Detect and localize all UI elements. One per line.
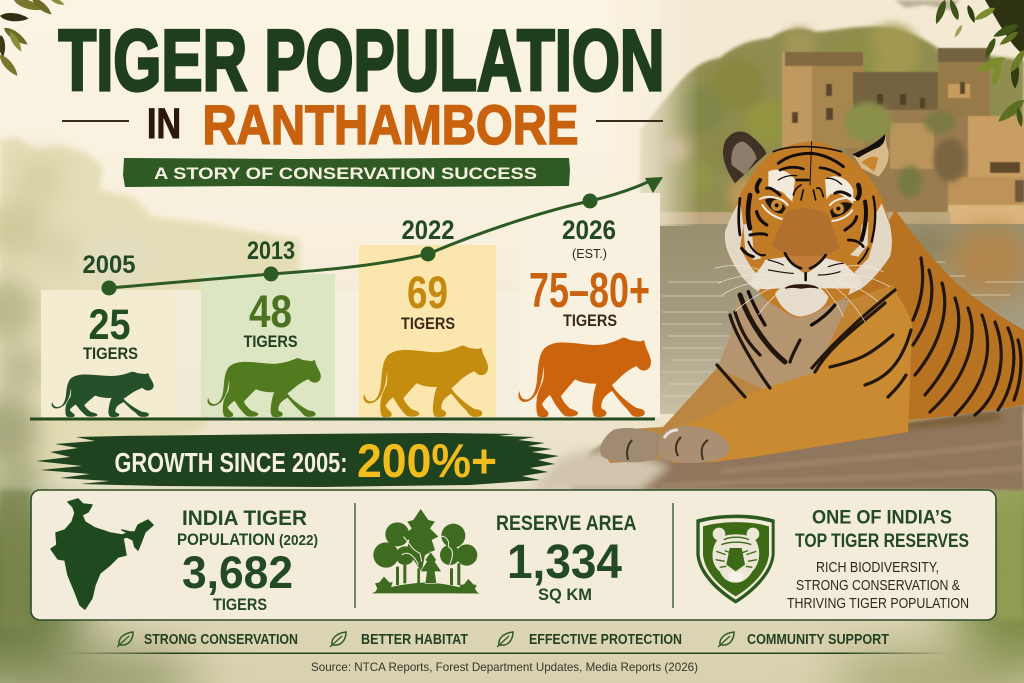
- chin: [775, 282, 828, 317]
- fort: [782, 48, 1024, 227]
- icon: tiger shield: [696, 515, 775, 604]
- top reserves text: THRIVING TIGER POPULATION: [787, 596, 969, 612]
- ground line: [30, 418, 655, 420]
- left ear: [723, 132, 767, 183]
- India population text: 3,682: [182, 547, 293, 598]
- India population text: INDIA TIGER: [182, 507, 307, 530]
- source note: Source: NTCA Reports, Forest Department Updates, Media Reports (2026): [311, 660, 698, 674]
- rock ledge: [530, 404, 1024, 492]
- factor: community support: COMMUNITY SUPPORT: [747, 632, 889, 648]
- icon: forest: [372, 509, 480, 593]
- column: 2022: 2022: [402, 215, 454, 245]
- factor: better habitat: [330, 632, 468, 648]
- cheek ruffs: [725, 200, 892, 295]
- factor: effective protection: EFFECTIVE PROTECTION: [529, 632, 682, 648]
- column: 2005: [41, 251, 176, 417]
- column: 2013: [201, 237, 335, 417]
- reserve area text: 1,334: [507, 536, 622, 589]
- title: TIGER POPULATION: [58, 13, 664, 109]
- column: 2013: 2013: [247, 237, 295, 265]
- nose: [785, 253, 826, 280]
- head base: [725, 142, 892, 318]
- column: 2026 estimate: TIGERS: [563, 312, 617, 330]
- India population text: TIGERS: [213, 596, 267, 614]
- tagline banner: A STORY OF CONSERVATION SUCCESS: [154, 164, 537, 183]
- India population text: (2022): [279, 533, 318, 549]
- tiger body: [800, 210, 1024, 420]
- tiger chest: [717, 285, 912, 392]
- nose bridge: [772, 208, 840, 257]
- forehead patches: [768, 170, 853, 203]
- factor: strong conservation: STRONG CONSERVATION: [144, 632, 298, 648]
- top reserves text: TOP TIGER RESERVES: [795, 531, 969, 552]
- growth callout: [36, 433, 559, 487]
- column: 2026 estimate: [518, 193, 660, 417]
- muzzle: [750, 257, 863, 289]
- paws: [600, 426, 729, 463]
- face stripes: [739, 142, 875, 325]
- column: 2026 estimate: 75–80+: [529, 264, 650, 318]
- trend line with arrow: [102, 177, 663, 296]
- right ear: [852, 134, 889, 177]
- tiger head: [715, 132, 892, 325]
- reserve area text: SQ KM: [538, 585, 592, 604]
- column: 2022: [359, 215, 496, 417]
- foliage: top left corner: [0, 0, 65, 78]
- column: 2022: 69: [407, 267, 448, 318]
- column: 2005: 2005: [82, 251, 136, 279]
- eyes: [760, 197, 855, 221]
- top reserves text: [787, 508, 969, 612]
- column: 2026 estimate: 2026: [562, 215, 616, 245]
- top reserves text: ONE OF INDIA’S: [812, 508, 952, 528]
- whiskers: [715, 265, 890, 322]
- subtitle line: in Ranthambore: RANTHAMBORE: [202, 93, 578, 156]
- photo backdrop: fort, hills and lake: [615, 0, 1024, 414]
- success factors: [117, 632, 889, 648]
- factor: better habitat: BETTER HABITAT: [361, 632, 468, 648]
- top reserves text: RICH BIODIVERSITY,: [816, 560, 939, 576]
- reserve area text: RESERVE AREA: [496, 512, 636, 535]
- India population text: [177, 507, 318, 614]
- panel: key facts: [31, 490, 996, 620]
- photo: Bengal tiger: [600, 132, 1024, 463]
- icon: India map: [51, 499, 153, 609]
- column: 2026 estimate: (EST.): [572, 246, 607, 261]
- body stripes: [717, 258, 1021, 415]
- subtitle line: in Ranthambore: IN: [147, 100, 181, 148]
- mouth: [785, 285, 818, 288]
- foliage: top right corner: [895, 0, 1024, 127]
- tagline banner: [123, 158, 570, 187]
- title: [58, 13, 664, 156]
- column: 2005: TIGERS: [83, 345, 138, 363]
- top reserves text: STRONG CONSERVATION &: [796, 578, 960, 594]
- column: 2005: 25: [88, 301, 130, 349]
- column: 2013: 48: [249, 286, 292, 337]
- chart backing: [41, 290, 660, 417]
- column: 2022: TIGERS: [401, 315, 455, 333]
- growth callout: 200%+: [357, 434, 497, 487]
- column: 2013: TIGERS: [244, 333, 298, 351]
- India population text: POPULATION: [177, 531, 275, 549]
- tiger rear arm: [600, 368, 770, 463]
- reserve area text: [496, 512, 636, 604]
- tiger shoulder and front arm: [658, 290, 912, 463]
- chart: tiger population timeline: [30, 177, 663, 419]
- growth callout: GROWTH SINCE 2005:: [114, 447, 348, 478]
